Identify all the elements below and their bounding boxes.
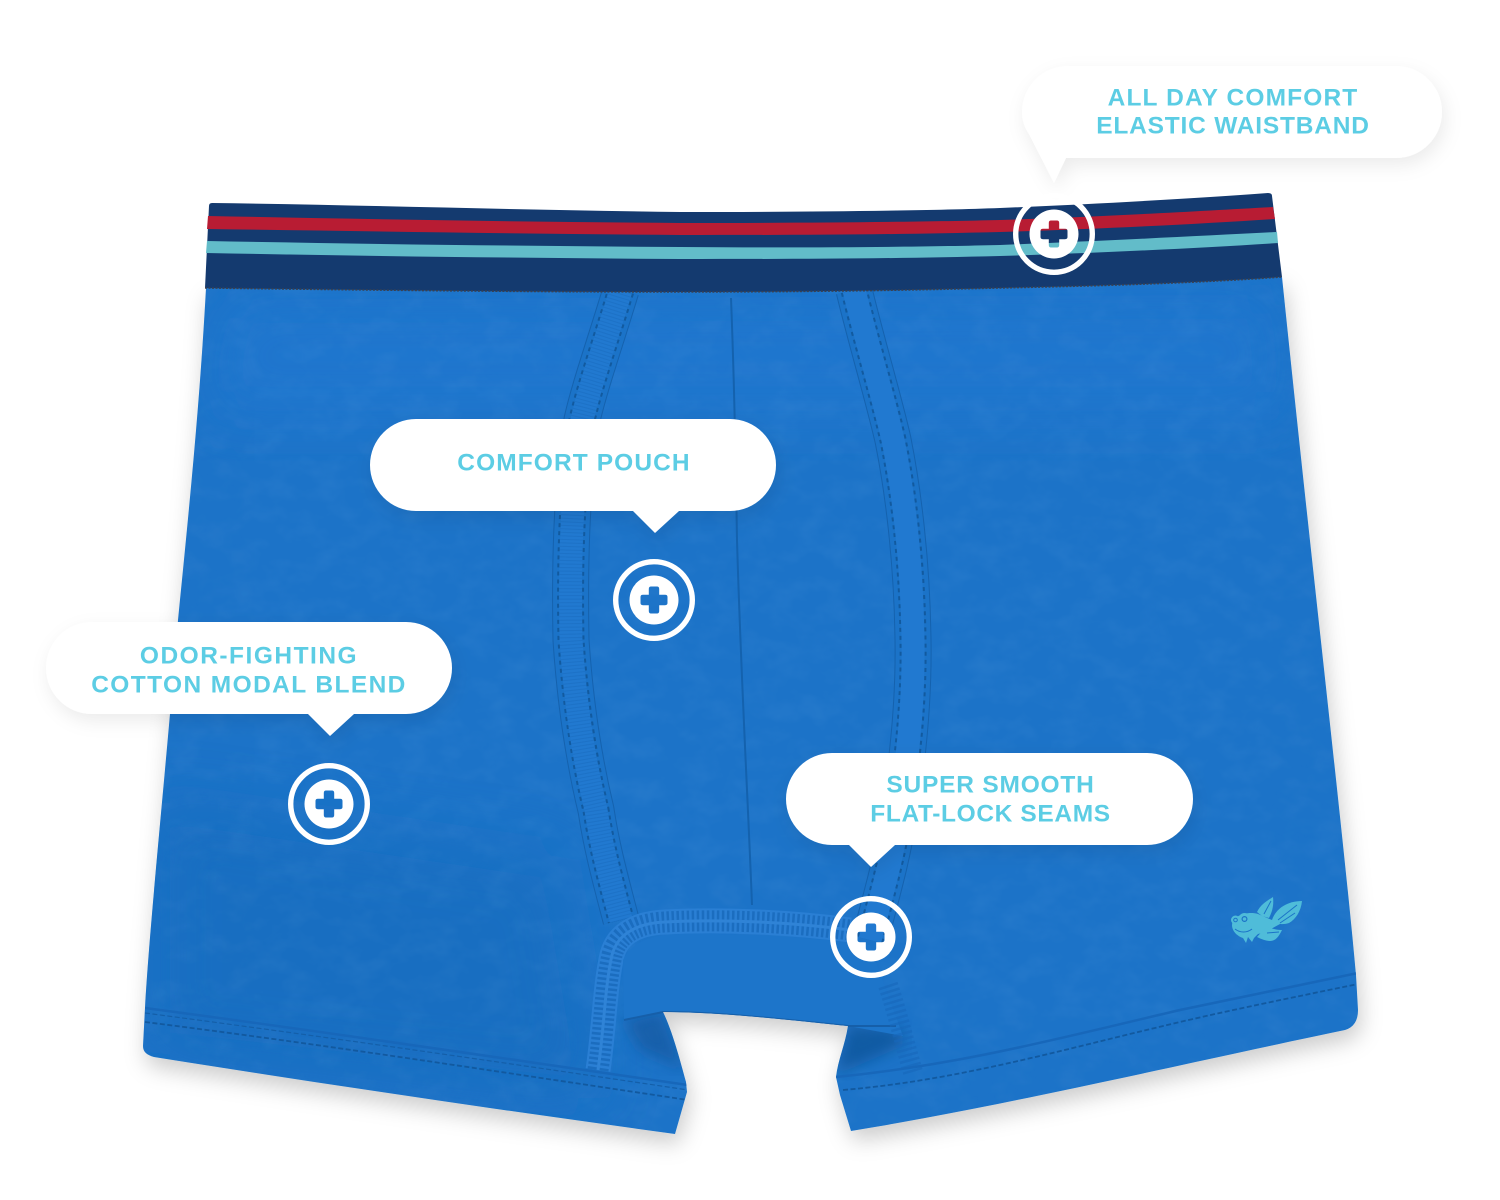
callout text: ODOR-FIGHTING <box>140 642 358 670</box>
fish logo <box>1231 897 1302 943</box>
callout: super smooth flat-lock seams <box>786 753 1193 867</box>
red stripe <box>207 207 1275 235</box>
marker: cotton modal blend <box>291 766 367 842</box>
elastic waistband <box>205 193 1282 292</box>
right leg seam <box>888 985 913 1072</box>
gusset stitched seam <box>598 921 850 1070</box>
callout text: ELASTIC WAISTBAND <box>1096 112 1370 140</box>
marker: comfort pouch <box>616 562 692 638</box>
fly centre line <box>731 298 752 905</box>
navy band <box>205 193 1282 292</box>
left inner leg shade <box>624 1013 682 1069</box>
callout: all day comfort elastic waistband <box>1022 66 1442 183</box>
marker: flat-lock seams <box>833 899 909 975</box>
garment body <box>143 277 1358 1134</box>
fish fins <box>1257 897 1302 941</box>
left seam <box>571 290 621 920</box>
fabric details: seams, folds and hems <box>130 280 1370 1150</box>
callout: comfort pouch <box>370 419 776 533</box>
callout text: ALL DAY COMFORT <box>1108 84 1358 112</box>
callout text: COMFORT POUCH <box>457 450 691 476</box>
right inner leg shade <box>836 1024 905 1075</box>
gusset panel <box>623 958 903 1036</box>
right hem <box>836 973 1358 1090</box>
right seam <box>854 290 913 940</box>
callout text: COTTON MODAL BLEND <box>91 672 407 698</box>
callout text: SUPER SMOOTH <box>886 772 1095 798</box>
gusset panel lower shadow line <box>624 1012 896 1026</box>
band bottom stitching <box>205 277 1282 292</box>
teal stripe <box>206 232 1278 259</box>
marker: waistband <box>1016 196 1092 272</box>
callout text: FLAT-LOCK SEAMS <box>870 800 1111 828</box>
left hem <box>145 1008 688 1100</box>
callout: odor-fighting cotton modal blend <box>46 622 452 736</box>
